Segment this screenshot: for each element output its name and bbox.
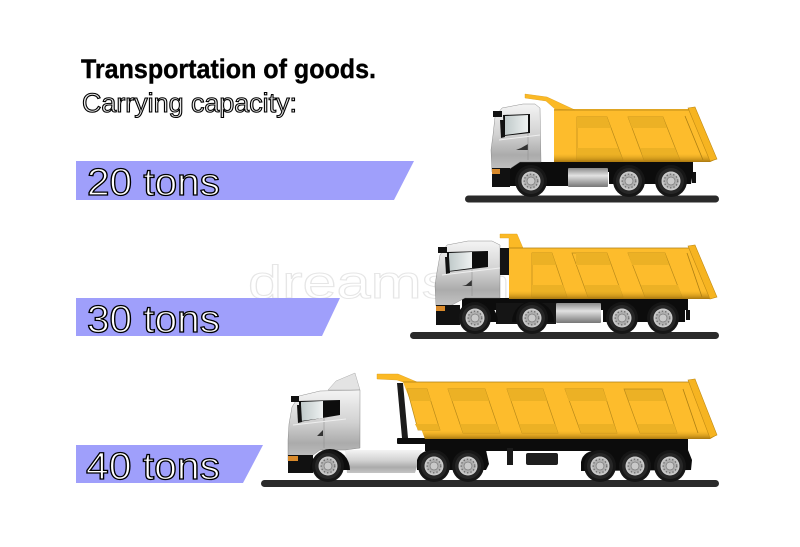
subtitle: Carrying capacity: — [82, 88, 297, 118]
label: 30 tons: 30 tons — [87, 299, 220, 341]
title: Transportation of goods. — [81, 54, 376, 84]
truck: 30 tons dump truck — [410, 234, 719, 339]
watermark: dreamstime — [248, 256, 568, 308]
label: 40 tons — [76, 445, 263, 488]
label: 20 tons: 20 tons — [87, 162, 220, 204]
label: 20 tons — [76, 161, 414, 204]
truck: 20 tons dump truck — [465, 94, 719, 202]
label: 30 tons — [76, 298, 340, 341]
label: 40 tons: 40 tons — [86, 446, 220, 488]
truck: 40 tons tractor and dump semi-trailer — [261, 373, 719, 487]
